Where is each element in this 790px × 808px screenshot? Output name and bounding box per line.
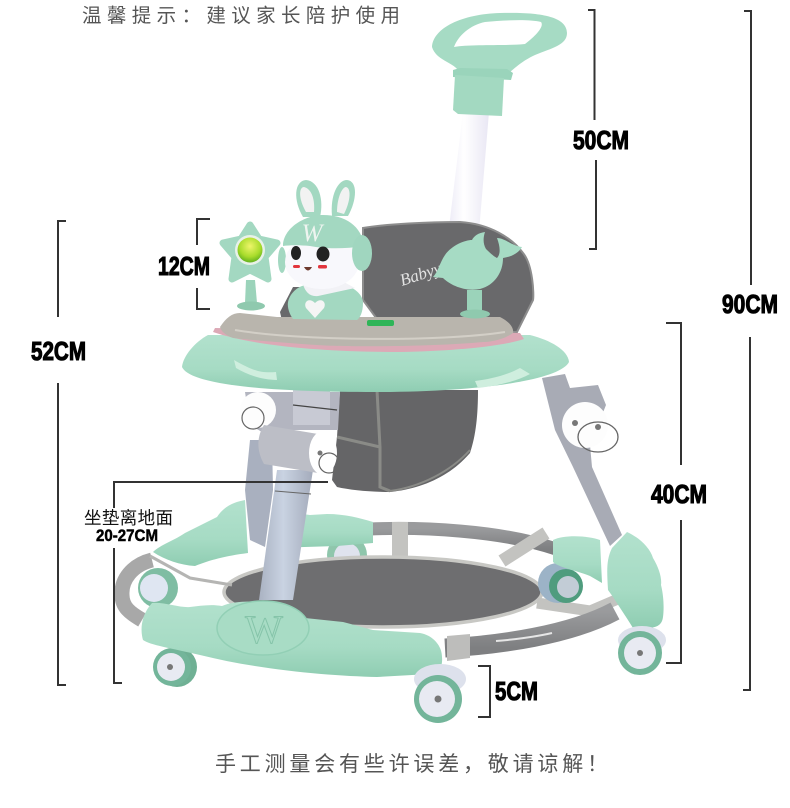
dimension: wheel 5CM: 5CM xyxy=(495,676,538,706)
base ring back tube xyxy=(370,522,556,561)
top notice: 温馨提示：建议家长陪护使用 xyxy=(82,5,400,27)
dimension: tray height 52CM: 52CM xyxy=(31,336,86,366)
dimension: seat height 20-27CM xyxy=(84,482,328,683)
right cylinder xyxy=(562,402,618,452)
dimension: handle 50CM: 50CM xyxy=(573,125,629,155)
push handle xyxy=(432,13,567,244)
walker product illustration xyxy=(122,13,666,723)
bottom notice: 手工测量会有些许误差，敬请谅解！ xyxy=(215,753,608,776)
dimension: total height 90CM xyxy=(722,11,778,690)
dimension: seat height 20-27CM: 坐垫离地面 xyxy=(84,508,173,528)
central bracket and left cylinders xyxy=(240,390,340,475)
front column xyxy=(259,470,313,600)
floor mat xyxy=(224,557,618,627)
dimension: total height 90CM: 90CM xyxy=(722,289,778,319)
front tube xyxy=(445,611,615,661)
star toy xyxy=(223,225,277,310)
dimension: seat height 20-27CM: 20-27CM xyxy=(96,526,158,545)
dimension: toy 12CM: 12CM xyxy=(158,251,210,281)
dimension: handle 50CM xyxy=(573,10,629,249)
base green joints xyxy=(153,500,602,583)
front centre wheel xyxy=(414,664,466,723)
front right wheel xyxy=(618,626,666,675)
front right leg xyxy=(542,374,622,546)
left grey tube and strap xyxy=(122,556,232,620)
dolphin toy xyxy=(433,232,522,318)
dimension: leg 40CM xyxy=(651,323,707,663)
rear left leg xyxy=(245,440,273,547)
hanging seat xyxy=(332,390,478,492)
front base plate xyxy=(142,601,442,677)
tray ring xyxy=(182,313,569,392)
rear base wheel centre xyxy=(327,535,367,575)
dimension: tray height 52CM xyxy=(31,221,86,685)
right base bracket xyxy=(607,532,664,628)
front left wheel xyxy=(153,647,197,687)
dimension: wheel 5CM xyxy=(478,666,538,717)
rear base wheels xyxy=(138,563,583,608)
rear seat back xyxy=(280,222,533,332)
rear seat back: Babyy xyxy=(397,258,444,290)
rabbit toy xyxy=(278,180,372,320)
rabbit toy: W xyxy=(302,220,325,247)
dimension: toy 12CM xyxy=(158,219,210,309)
dimension: leg 40CM: 40CM xyxy=(651,479,707,509)
front base plate: W xyxy=(245,607,283,652)
